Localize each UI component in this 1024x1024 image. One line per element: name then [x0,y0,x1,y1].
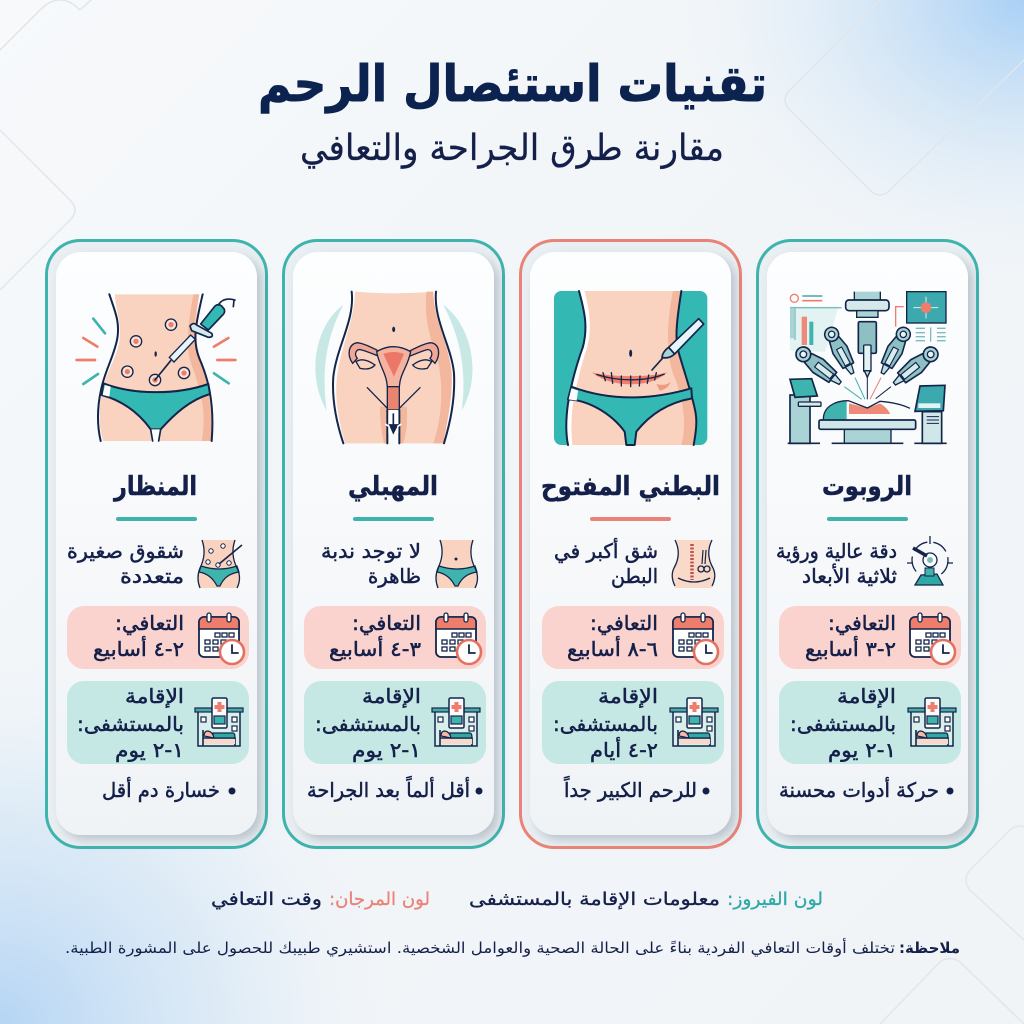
panel: robot [758,240,978,848]
subtitle: مقارنة طرق الجراحة والتعافي [300,128,724,169]
illustration: laparoscopy ports [77,294,235,441]
icon: vertical incision [672,540,715,588]
recovery box: robot: ٢-٣ أسابيع [805,636,896,661]
legend: معلومات الإقامة بالمستشفى [469,889,720,910]
hospital stay box: robot [779,681,961,764]
hospital stay box: laparoscopic [67,681,249,764]
title: تقنيات استئصال الرحم [258,55,767,114]
benefit: robot: ثلاثية الأبعاد [802,564,897,588]
legend [211,889,823,910]
recovery box: vaginal: التعافي: [352,611,421,636]
benefit: open abdominal [554,538,658,588]
bullet: open abdominal: للرحم الكبير جداً [564,776,697,802]
note: تختلف أوقات التعافي الفردية بناءً على الحالة الصحية والعوامل الشخصية. استشيري طبيبك للحصول على المشورة الطبية. [65,938,895,958]
hospital stay box: open abdominal: الإقامة [598,684,658,708]
hospital stay box: vaginal: بالمستشفى: [315,712,421,736]
heading: open abdominal [541,472,720,521]
heading: robot [822,472,912,521]
benefit: laparoscopic: شقوق صغيرة [67,539,184,563]
hospital stay box: robot: بالمستشفى: [790,712,896,736]
benefit: robot [776,539,897,588]
hospital stay box: vaginal [304,681,486,764]
legend: وقت التعافي [211,889,322,910]
bullet: vaginal: أقل ألماً بعد الجراحة [307,776,470,802]
legend: لون الفيروز: [727,889,823,910]
heading: laparoscopic: المنظار [112,472,197,502]
illustration: surgical robot [788,292,947,443]
recovery box: vaginal [304,606,486,669]
illustration: uterus and vaginal route [315,292,472,443]
heading: robot: الروبوت [822,472,912,502]
recovery box: robot: التعافي: [828,611,896,636]
hospital stay box: open abdominal: ٢-٤ أيام [590,737,658,762]
recovery box: open abdominal: التعافي: [590,611,658,636]
recovery box: robot [779,606,961,669]
icon: robotic vision [907,536,953,585]
benefit: laparoscopic [67,539,184,588]
hospital stay box: vaginal: ١-٢ يوم [352,738,421,762]
benefit: vaginal: لا توجد ندبة [321,539,421,563]
hospital stay box: vaginal: الإقامة [362,684,421,708]
icon: intact abdomen [436,540,478,588]
heading: open abdominal: البطني المفتوح [541,472,720,502]
hospital stay box: open abdominal: بالمستشفى: [553,712,658,736]
benefit: open abdominal: شق أكبر في [554,538,658,564]
benefit: vaginal: ظاهرة [368,564,421,588]
benefit: laparoscopic: متعددة [120,564,184,588]
hospital stay box: open abdominal [542,681,724,764]
recovery box: laparoscopic: ٢-٤ أسابيع [93,636,184,661]
benefit: vaginal [321,539,421,588]
panel: vaginal [284,240,504,848]
benefit: robot: دقة عالية ورؤية [776,539,897,563]
bullet: robot: حركة أدوات محسنة [779,777,939,802]
recovery box: laparoscopic: التعافي: [115,611,184,636]
hospital stay box: laparoscopic: الإقامة [125,684,184,708]
recovery box: open abdominal [542,606,724,669]
recovery box: open abdominal: ٦-٨ أسابيع [567,636,658,661]
hospital stay box: laparoscopic: ١-٢ يوم [115,738,184,762]
benefit: open abdominal: البطن [611,564,658,588]
legend: لون المرجان: [329,889,430,910]
note: ملاحظة: [899,939,960,957]
panel: open abdominal [520,240,740,848]
illustration: abdominal incision [554,291,707,445]
heading: vaginal: المهبلي [348,472,438,502]
recovery box: vaginal: ٣-٤ أسابيع [329,636,421,661]
panel: laparoscopic [46,240,266,848]
icon: small ports [198,540,242,588]
hospital stay box: robot: ١-٢ يوم [828,738,896,762]
hospital stay box: laparoscopic: بالمستشفى: [77,712,184,736]
heading: vaginal [348,472,438,521]
heading: laparoscopic [112,472,197,521]
bullet: laparoscopic: خسارة دم أقل [102,777,220,802]
hospital stay box: robot: الإقامة [837,684,896,708]
recovery box: laparoscopic [67,606,249,669]
